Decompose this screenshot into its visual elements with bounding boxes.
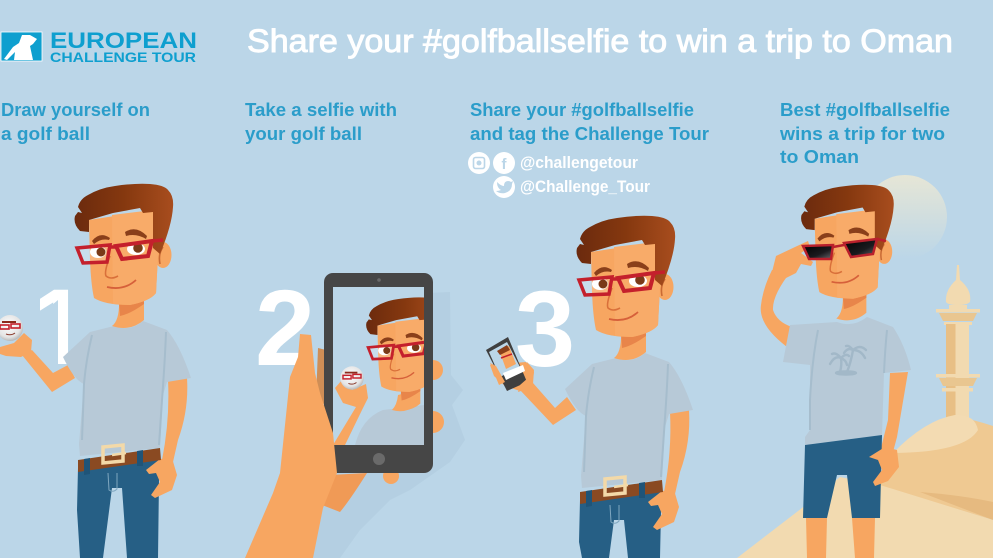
golf ball xyxy=(0,315,23,341)
handle: instagram and facebook: @challengetour xyxy=(520,154,639,172)
legs xyxy=(806,518,875,558)
hand behind phone xyxy=(490,362,534,391)
hand xyxy=(245,334,337,558)
step 4 text: to Oman xyxy=(780,146,859,167)
number 1: 1 xyxy=(28,266,88,387)
shorts xyxy=(803,435,882,518)
phone body xyxy=(324,273,433,473)
icon: facebook: f xyxy=(502,156,508,173)
icon: twitter xyxy=(493,176,515,198)
minaret xyxy=(936,265,980,444)
figure 3: man holding phone xyxy=(486,216,693,558)
dunes xyxy=(737,415,993,558)
hand fingers xyxy=(490,362,534,392)
logo: European Challenge Tour: CHALLENGE TOUR xyxy=(50,50,196,65)
step 3 text: Share your #golfballselfie xyxy=(470,99,694,120)
lowered arm xyxy=(880,372,908,452)
icon: facebook xyxy=(493,152,515,174)
title: Share your #golfballselfie to win a trip to Oman xyxy=(247,23,953,59)
figure 4: man in sunglasses xyxy=(761,185,911,558)
icon: instagram xyxy=(468,152,490,174)
logo: European Challenge Tour: EUROPEAN xyxy=(50,28,197,53)
body xyxy=(565,353,693,530)
figure 2: hand holding phone xyxy=(245,273,465,558)
step 1 text: a golf ball xyxy=(1,123,90,144)
head xyxy=(577,216,675,360)
screen xyxy=(333,287,424,445)
head xyxy=(801,185,894,320)
jeans xyxy=(77,458,159,558)
sunglasses xyxy=(803,239,886,259)
step 4 text: Best #golfballselfie xyxy=(780,99,950,120)
phone shadow xyxy=(300,292,465,558)
step 4 text: wins a trip for two xyxy=(779,123,945,144)
camera xyxy=(377,278,381,282)
head xyxy=(75,184,173,328)
glasses xyxy=(579,272,665,295)
small phone xyxy=(486,337,527,391)
handle: twitter: @Challenge_Tour xyxy=(520,178,651,196)
t-shirt xyxy=(783,317,911,445)
step 3 text: and tag the Challenge Tour xyxy=(470,123,709,144)
belt xyxy=(78,445,161,491)
selfie on screen xyxy=(334,297,424,445)
step 2 text: your golf ball xyxy=(245,123,362,144)
lowered hand xyxy=(869,447,899,486)
number 3: 3 xyxy=(515,268,575,389)
raised hand xyxy=(772,241,813,280)
step 1 text: Draw yourself on xyxy=(1,99,150,120)
palm tree graphic xyxy=(830,346,866,374)
shirt folds xyxy=(810,330,887,430)
social handles xyxy=(468,152,651,198)
raised arm and hand xyxy=(0,333,75,392)
raised arm xyxy=(761,270,792,347)
step 2 text: Take a selfie with xyxy=(245,99,397,120)
figure 1: man holding golf ball xyxy=(0,184,191,558)
body xyxy=(63,321,191,498)
belt xyxy=(580,477,663,523)
arm xyxy=(520,383,576,425)
home button xyxy=(373,453,385,465)
fingers behind phone xyxy=(316,348,444,512)
number 2: 2 xyxy=(255,267,315,388)
glasses xyxy=(77,240,163,263)
jeans xyxy=(579,490,661,558)
logo: European Challenge Tour xyxy=(1,28,197,65)
sun xyxy=(863,175,947,259)
